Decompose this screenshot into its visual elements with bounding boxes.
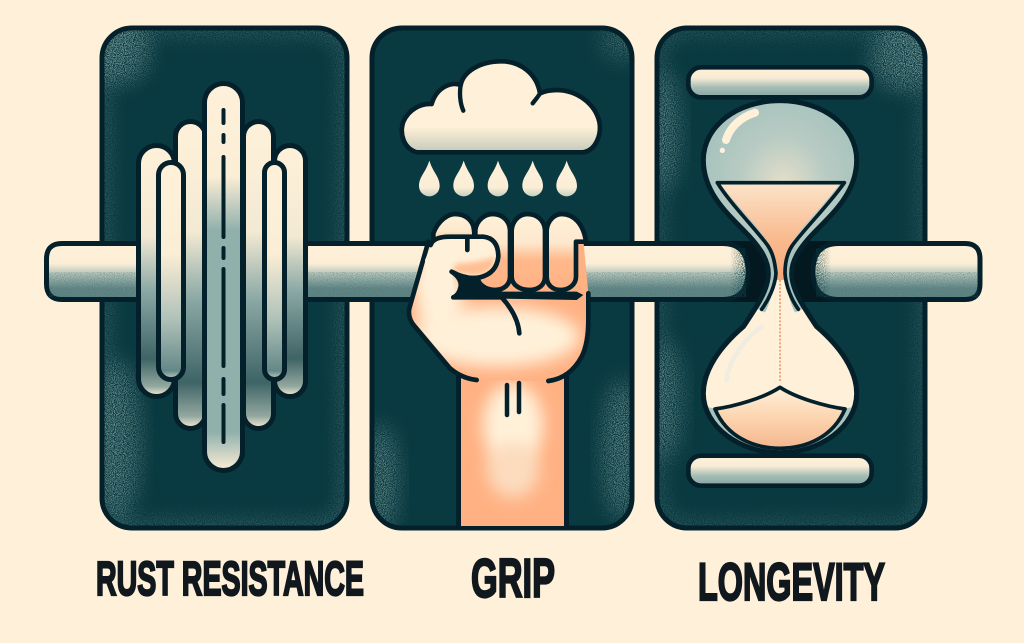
rain drops [419, 161, 577, 196]
bottom cap [688, 456, 872, 486]
center plate dashes [222, 110, 226, 442]
glass outline [703, 101, 857, 453]
dark grip shadow [457, 277, 583, 300]
panel: longevity background [647, 19, 939, 528]
label: grip: GRIP [471, 547, 555, 609]
inner left plate [158, 162, 184, 380]
center plate [204, 84, 242, 470]
outer left plate [138, 146, 174, 396]
palm [409, 240, 588, 381]
barbell bar [46, 241, 980, 302]
icon: hourglass [688, 67, 872, 486]
label: rust resistance: RUST RESISTANCE [96, 553, 364, 606]
top cap [688, 67, 872, 97]
icon: weight plates [138, 84, 306, 470]
middle right plate [244, 122, 274, 428]
glass highlights [726, 113, 755, 140]
outer right plate [274, 146, 306, 396]
panel: rust resistance background [86, 16, 347, 528]
cloud [402, 61, 600, 152]
icon: rain cloud [402, 61, 600, 196]
top sand [721, 185, 839, 280]
middle left plate [176, 122, 206, 428]
inner right plate [264, 162, 284, 380]
glass inner lines [715, 183, 845, 448]
bottom sand [717, 387, 843, 447]
glass body [706, 103, 854, 450]
icon: gripping hand [409, 214, 588, 381]
thumb [425, 237, 519, 333]
label: longevity: LONGEVITY [698, 553, 885, 612]
panel: grip background [362, 18, 644, 535]
fingers [433, 214, 586, 290]
icon: wrist [458, 370, 567, 527]
falling sand stream [777, 280, 783, 382]
